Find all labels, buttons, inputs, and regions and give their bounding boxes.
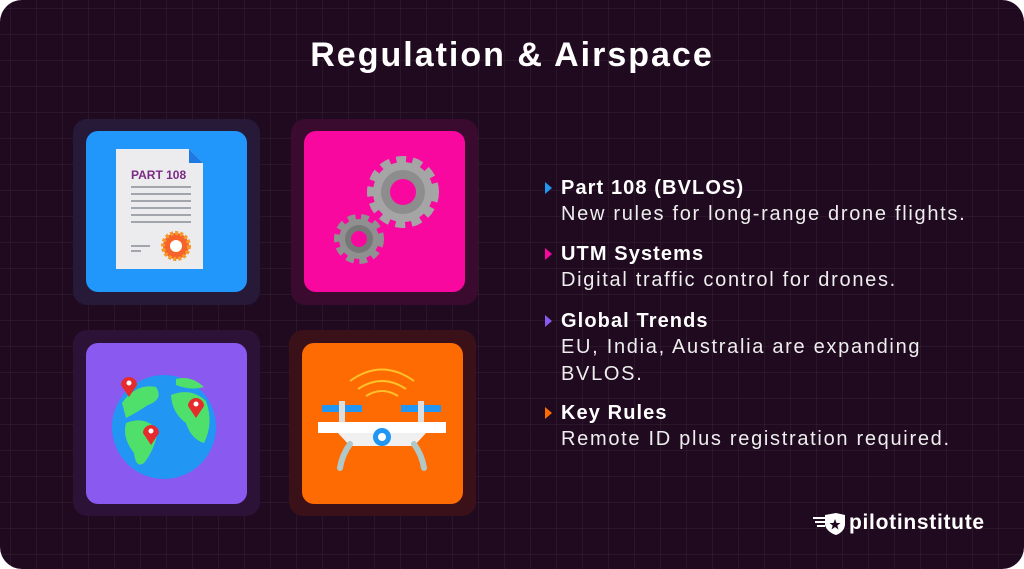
text block: Part 108: Part 108 (BVLOS) bbox=[561, 177, 744, 199]
text block: Global Trends: EU, India, Australia are expanding bbox=[561, 336, 921, 358]
text block: Part 108 bbox=[545, 177, 966, 225]
panel: gears tile bbox=[291, 119, 478, 305]
text block: UTM Systems: UTM Systems bbox=[561, 243, 704, 265]
text block: Key Rules bbox=[545, 402, 951, 450]
text block: Part 108: New rules for long-range drone flights. bbox=[561, 203, 966, 225]
panel: globe tile bbox=[73, 330, 260, 516]
text block: UTM Systems: Digital traffic control for drones. bbox=[561, 269, 897, 291]
title: Regulation & Airspace bbox=[310, 36, 714, 74]
panel: drone tile bbox=[289, 330, 476, 516]
logo: pilotinstitute: pilotinstitute bbox=[849, 511, 985, 534]
text block: Key Rules: Key Rules bbox=[561, 402, 668, 424]
panel: document tile bbox=[73, 119, 260, 305]
text block: Key Rules: Remote ID plus registration required. bbox=[561, 428, 951, 450]
panel: document tile: PART 108 bbox=[131, 168, 186, 182]
text block: Global Trends: BVLOS. bbox=[561, 363, 643, 385]
text block: Global Trends bbox=[545, 310, 921, 385]
text block: UTM Systems bbox=[545, 243, 897, 291]
text block: Global Trends: Global Trends bbox=[561, 310, 709, 332]
